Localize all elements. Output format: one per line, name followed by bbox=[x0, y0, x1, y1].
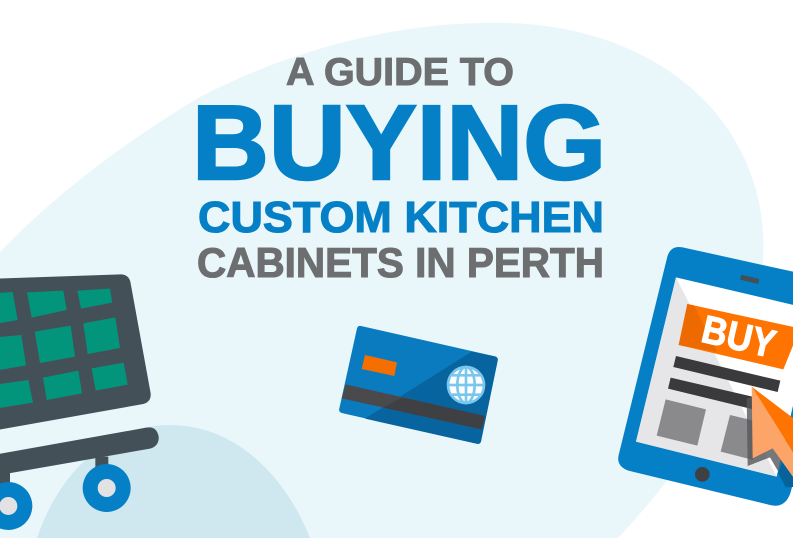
card body bbox=[339, 326, 498, 444]
home button bbox=[695, 467, 710, 482]
title bbox=[192, 51, 606, 286]
heading line: CABINETS IN PERTH: CABINETS IN PERTH bbox=[197, 239, 604, 286]
icon: credit card bbox=[339, 326, 498, 444]
background hill bbox=[37, 425, 310, 538]
heading line: CUSTOM KITCHEN: CUSTOM KITCHEN bbox=[198, 193, 604, 242]
tablet body bbox=[618, 247, 793, 506]
cart basket bbox=[0, 274, 151, 431]
globe bbox=[447, 366, 485, 404]
card shade bbox=[365, 352, 498, 444]
stripe shade bbox=[383, 397, 485, 429]
magnetic stripe bbox=[342, 384, 485, 429]
buy banner bbox=[679, 304, 793, 369]
tablet edge shade bbox=[778, 460, 793, 487]
banner shade bbox=[679, 304, 717, 352]
buy label: BUY bbox=[698, 307, 780, 367]
image placeholder two bbox=[721, 415, 757, 460]
screen shade bbox=[636, 277, 777, 477]
heading line: BUYING: BUYING bbox=[192, 84, 606, 202]
tablet screen bbox=[636, 277, 793, 477]
basket grid bbox=[0, 289, 128, 409]
rear wheel bbox=[0, 482, 32, 530]
image placeholder one bbox=[657, 399, 706, 446]
text bar two bbox=[668, 378, 757, 409]
cart bar bbox=[0, 427, 159, 476]
camera slot bbox=[740, 275, 759, 284]
cursor shadow bbox=[747, 397, 782, 472]
cart axle posts bbox=[0, 457, 108, 487]
icon: shopping cart bbox=[0, 274, 159, 530]
front wheel bbox=[83, 464, 131, 512]
cursor arrow bbox=[752, 387, 793, 487]
text bar one bbox=[673, 356, 780, 392]
card chip bbox=[362, 355, 397, 376]
heading line: A GUIDE TO: A GUIDE TO bbox=[286, 51, 514, 94]
icon: tablet bbox=[618, 247, 793, 506]
